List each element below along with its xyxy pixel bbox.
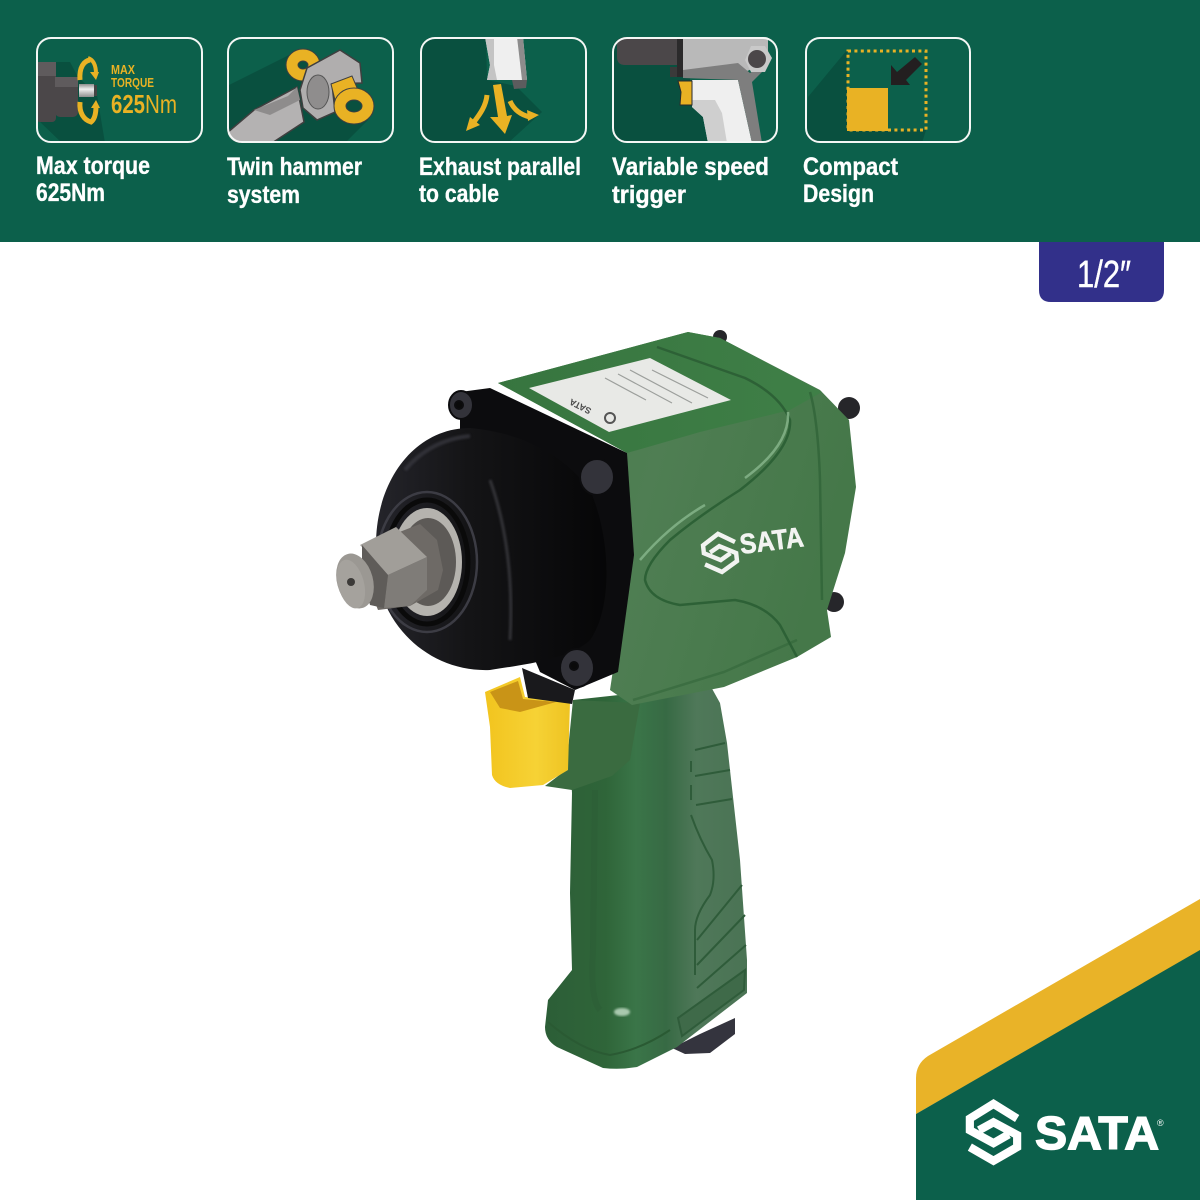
logo mark (970, 1104, 1017, 1161)
trigger housing (545, 700, 640, 790)
caption: twin hammer (227, 153, 362, 209)
caption: compact: Compact (803, 153, 899, 181)
caption: compact (803, 153, 899, 208)
brand logo (970, 1104, 1164, 1161)
rear bolts (713, 330, 860, 612)
bell highlights (377, 436, 511, 640)
trigger lever (485, 668, 575, 788)
motor body (498, 332, 856, 705)
feature icon: max torque (36, 58, 105, 143)
square drive (330, 524, 443, 613)
flange bolts (449, 391, 614, 687)
size badge: 1/2″ (1077, 254, 1131, 296)
bearing ring (392, 508, 462, 616)
caption: trigger: trigger (612, 181, 686, 209)
header band (0, 0, 1200, 242)
body top face (498, 332, 822, 453)
registered mark: ® (1157, 1118, 1164, 1128)
corner yellow stripe (916, 899, 1200, 1114)
caption: twin hammer: Twin hammer (227, 153, 362, 181)
feature card frame: compact (806, 38, 970, 142)
feature card frame: max torque (37, 38, 202, 142)
caption: max torque (36, 152, 150, 207)
pistol grip (545, 685, 747, 1069)
icon label: max torque: 625 (111, 89, 145, 119)
caption: max torque: 625Nm (36, 179, 105, 207)
feature card frame: exhaust (421, 38, 586, 142)
body contour lines (633, 347, 822, 700)
feature card frame: twin hammer (228, 38, 393, 142)
front flange (460, 388, 634, 690)
caption: trigger: Variable speed (612, 153, 769, 181)
icon label: max torque: TORQUE (111, 75, 154, 90)
body logo (702, 532, 738, 574)
caption: trigger (612, 153, 769, 209)
feature icon: variable speed trigger (612, 37, 772, 143)
impact housing bell (376, 428, 606, 670)
caption: twin hammer: system (227, 181, 300, 209)
grip details (548, 743, 746, 1055)
icon label: max torque: Nm (145, 89, 177, 119)
spec label: SATA (567, 396, 593, 416)
body logo text: SATA (738, 521, 805, 560)
icon label: max torque (111, 62, 177, 119)
caption: exhaust: Exhaust parallel (419, 153, 581, 181)
caption: compact: Design (803, 180, 874, 208)
icon label: max torque: MAX (111, 62, 135, 77)
caption: max torque: Max torque (36, 152, 150, 180)
air inlet (672, 1018, 735, 1054)
feature icon: compact design (806, 50, 926, 143)
size badge (1039, 242, 1164, 302)
feature card frame: trigger (613, 38, 777, 142)
caption: exhaust: to cable (419, 180, 499, 208)
feature icon: twin hammer (227, 50, 368, 143)
corner green panel (916, 950, 1200, 1200)
logo wordmark: SATA (1035, 1107, 1159, 1159)
feature icon: exhaust parallel to cable (420, 37, 542, 143)
spec label (529, 358, 731, 432)
body highlights (640, 412, 788, 560)
caption: exhaust (419, 153, 581, 208)
product photo: impact wrench (330, 330, 860, 1069)
